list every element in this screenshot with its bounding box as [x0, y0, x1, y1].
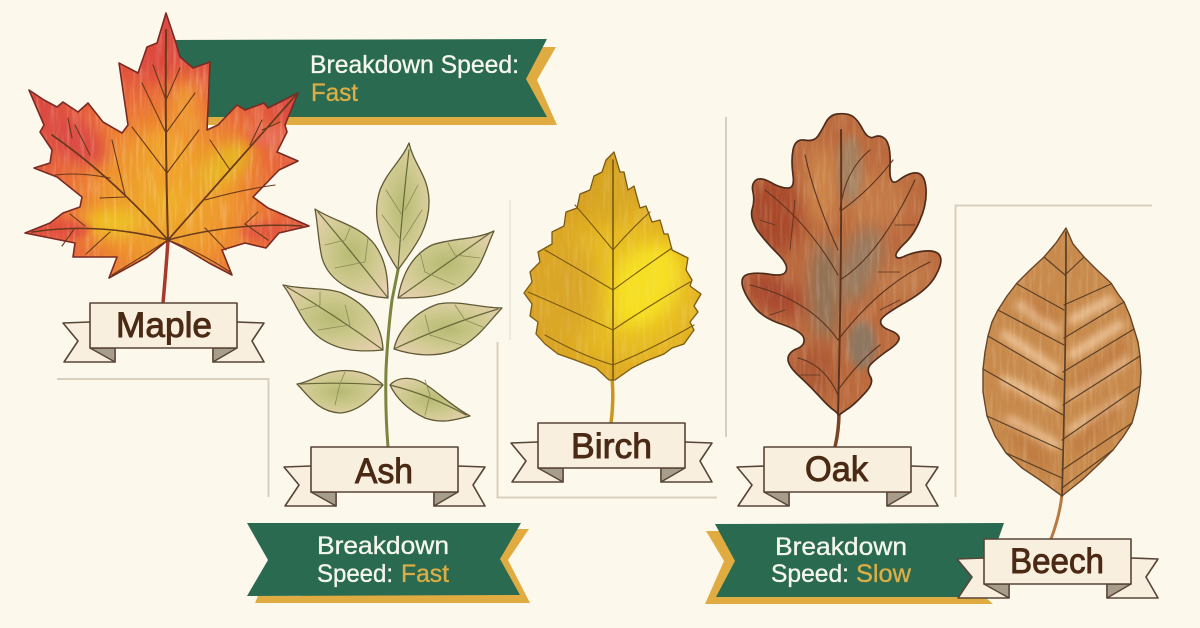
callout: maple breakdown speed: [170, 39, 557, 125]
banner: Birch: Birch: [571, 427, 652, 466]
ash stem and veins: [287, 150, 498, 447]
divider lines: [57, 117, 1152, 498]
leaf: birch: [520, 150, 705, 423]
banner: Ash: Ash: [355, 452, 413, 491]
callout: oak breakdown speed: [705, 523, 1004, 604]
leaf: beech: [980, 225, 1145, 539]
banner: Maple: [63, 303, 264, 362]
leaf: oak: [735, 110, 950, 447]
banner: Oak: Oak: [805, 450, 868, 489]
callout: maple breakdown speed: Breakdown Speed:: [310, 51, 519, 79]
banner: Birch: [511, 423, 712, 482]
banner: Maple: Maple: [116, 306, 212, 345]
banner: Oak: [737, 447, 938, 506]
callout: oak breakdown speed: Speed:: [771, 560, 849, 588]
callout: ash breakdown speed: [247, 523, 530, 603]
callout: oak breakdown speed: Slow: [856, 560, 912, 588]
callout: oak breakdown speed: Breakdown: [775, 533, 907, 561]
banner: Ash: [284, 447, 485, 506]
banner: Beech: [957, 539, 1158, 598]
leaf: maple: [20, 10, 315, 303]
callout: ash breakdown speed: Speed:: [317, 560, 393, 588]
callout: ash breakdown speed: Breakdown: [317, 532, 449, 560]
banner: Beech: Beech: [1010, 542, 1104, 581]
leaf: ash compound leaf: [283, 143, 502, 447]
callout: maple breakdown speed: Fast: [311, 79, 358, 107]
callout: ash breakdown speed: Fast: [401, 560, 449, 588]
ash leaflets: [283, 143, 502, 421]
